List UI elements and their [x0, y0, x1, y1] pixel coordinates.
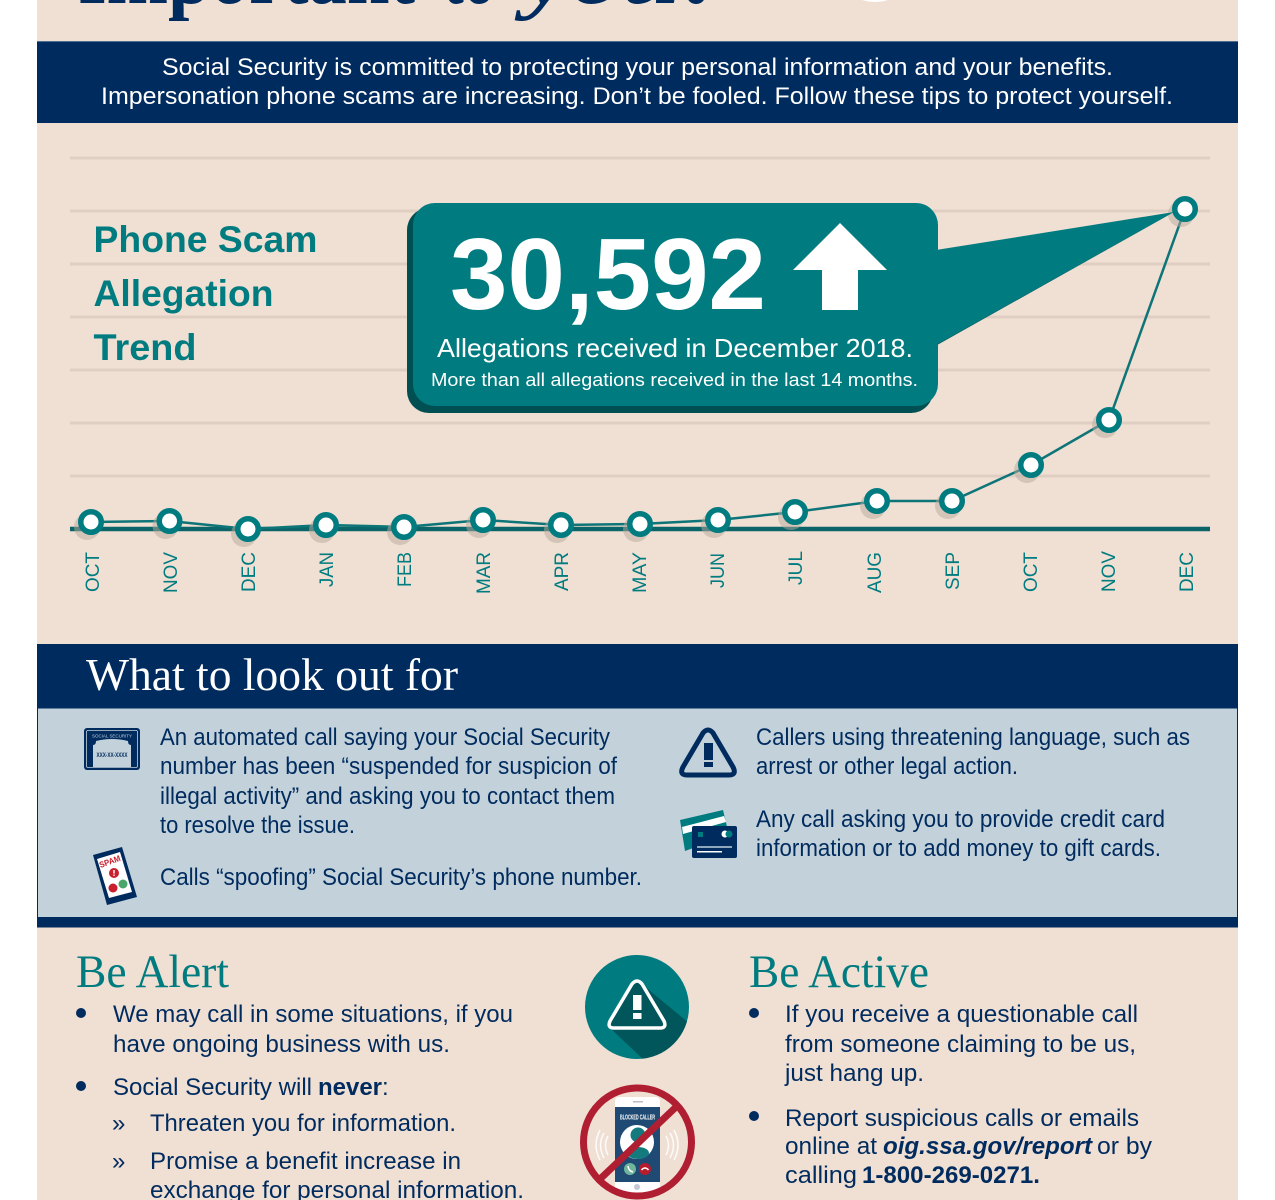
month labels: NOV — [1099, 551, 1120, 592]
icon: credit cards — [680, 810, 737, 858]
month labels: NOV — [161, 552, 182, 593]
icon: social security card: XXX-XX-XXXX — [96, 753, 128, 759]
bullet: report: Report suspicious calls or emails — [785, 1105, 1139, 1132]
intro banner: Social Security is committed to protecting your personal information and your benefits. — [162, 54, 1113, 81]
icon: social security card — [84, 728, 140, 770]
warning item: automated call: illegal activity” and asking you to contact them — [160, 783, 615, 810]
bullet: never: never — [318, 1074, 382, 1101]
month labels: JUL — [786, 551, 807, 585]
sub-bullet: promise: Promise a benefit increase in — [150, 1148, 461, 1175]
bullet: report: oig.ssa.gov/report — [883, 1133, 1093, 1160]
sub-bullet: promise — [112, 1148, 524, 1200]
bullet: report: 1-800-269-0271. — [862, 1162, 1040, 1189]
month labels: OCT — [1021, 552, 1042, 592]
bullet: ongoing business: have ongoing business with us. — [113, 1031, 450, 1058]
panel: be active — [749, 946, 1152, 1189]
section heading: What to look out for — [86, 650, 458, 700]
chart title: Trend — [94, 327, 196, 368]
bullet: never — [76, 1074, 389, 1101]
allegation count: 30,592 — [450, 219, 766, 331]
month labels: FEB — [395, 552, 416, 587]
callout text — [431, 333, 918, 390]
bullet: report: online at — [785, 1133, 877, 1160]
icon: no unknown callers phone — [584, 1088, 692, 1196]
warning item: automated call: to resolve the issue. — [160, 812, 355, 839]
icon: spam phone — [93, 847, 137, 905]
bullet: hang up: from someone claiming to be us, — [785, 1031, 1136, 1058]
bullet: hang up: If you receive a questionable call — [785, 1001, 1138, 1028]
month labels: MAY — [630, 552, 651, 593]
bullet: report: or by — [1097, 1133, 1152, 1160]
month labels: SEP — [943, 552, 964, 590]
callout text: Allegations received in December 2018. — [437, 333, 913, 363]
month labels — [83, 551, 1198, 594]
bullet: report: calling — [785, 1162, 857, 1189]
line chart: phone scam allegation trend — [70, 158, 1210, 594]
heading: be alert: Be Alert — [76, 946, 229, 998]
arrow: upward trend — [793, 223, 887, 310]
icon: warning triangle — [682, 730, 734, 775]
bullet: ongoing business: We may call in some situations, if you — [113, 1001, 513, 1028]
bullet: hang up: just hang up. — [784, 1060, 924, 1087]
data points — [74, 199, 1195, 547]
warning item: automated call: number has been “suspended for suspicion of — [160, 753, 617, 780]
panel: what to look out for — [37, 644, 1238, 928]
month labels: JUN — [708, 553, 729, 588]
bullet: never: Social Security will — [113, 1074, 312, 1101]
sub-bullet: promise: » — [112, 1148, 125, 1175]
warning item: credit card and gift cards: information or to add money to gift cards. — [756, 835, 1161, 862]
month labels: JAN — [317, 552, 338, 587]
warning item: automated call — [160, 724, 617, 839]
icon: alert circle — [585, 955, 690, 1061]
warning item: credit card and gift cards — [756, 806, 1165, 862]
bullet: ongoing business — [76, 1001, 513, 1058]
bullet: hang up — [749, 1001, 1138, 1087]
intro banner — [37, 41, 1238, 123]
month labels: DEC — [1177, 552, 1198, 592]
month labels: OCT — [83, 552, 104, 592]
bullet: never: : — [382, 1074, 389, 1101]
heading: be active: Be Active — [749, 946, 929, 998]
icon: spam phone: SPAM — [98, 853, 122, 870]
month labels: AUG — [865, 552, 886, 593]
data line — [91, 209, 1185, 529]
section heading — [37, 644, 1238, 708]
month labels: MAR — [474, 552, 495, 594]
panel: be alert — [76, 946, 524, 1200]
title — [78, 0, 888, 22]
warning item: automated call: An automated call saying your Social Security — [160, 724, 610, 751]
sound waves — [596, 1130, 678, 1160]
warning item: threatening language — [756, 724, 1190, 780]
chart title: Allegation — [94, 273, 274, 314]
callout: December 2018 allegations — [407, 203, 1174, 413]
chart title — [94, 219, 318, 368]
warning item: threatening language: Callers using threatening language, such as — [756, 724, 1190, 751]
chart title: Phone Scam — [94, 219, 318, 260]
sub-bullet: threaten: Threaten you for information. — [150, 1110, 456, 1137]
sub-bullet: threaten: » — [112, 1110, 125, 1137]
month labels: APR — [552, 552, 573, 591]
icon: social security card: SOCIAL SECURITY — [92, 734, 132, 738]
callout text: More than all allegations received in the last 14 months. — [431, 370, 918, 390]
warning item: spoofing: Calls “spoofing” Social Security’s phone number. — [160, 864, 642, 891]
intro banner: Impersonation phone scams are increasing. Don’t be fooled. Follow these tips to protect yourself. — [101, 83, 1173, 110]
month labels: DEC — [239, 552, 260, 592]
warning item: threatening language: arrest or other legal action. — [756, 753, 1018, 780]
bullet: report — [749, 1105, 1152, 1189]
icon: no unknown callers phone: BLOCKED CALLER — [620, 1114, 655, 1122]
warning item: credit card and gift cards: Any call asking you to provide credit card — [756, 806, 1165, 833]
